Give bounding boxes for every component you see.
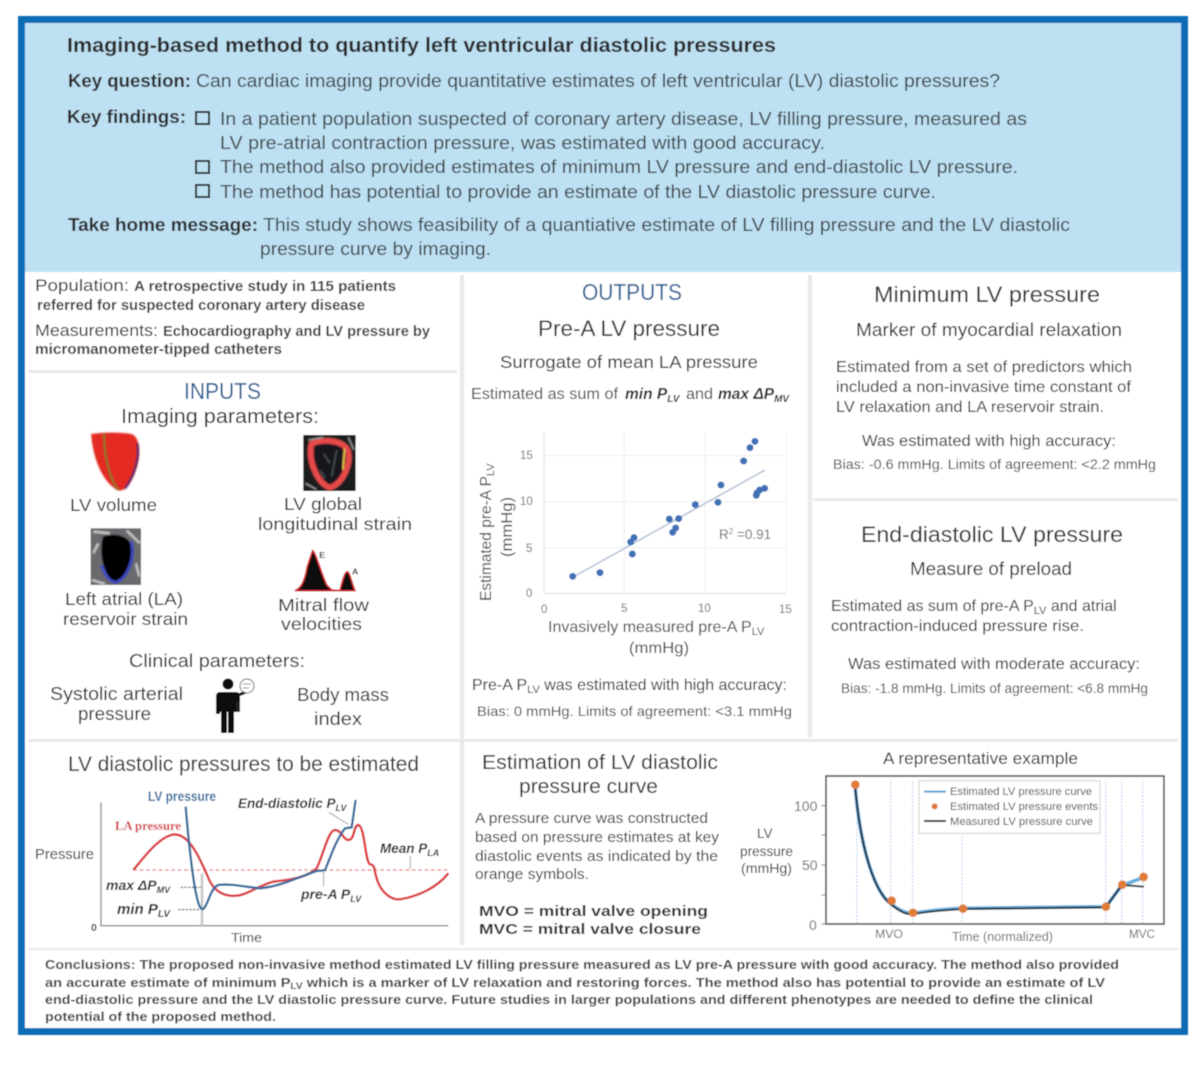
chart labels: LV [158,909,171,920]
panel: conclusions: Conclusions: The proposed non-invasive method estimated LV filling pressure measured as LV pre-A pressure with good accuracy. The method also provided [45,957,1119,972]
key findings: The method also provided estimates of minimum LV pressure and end-diastolic LV pressure. [220,157,1018,177]
icon: mitral flow velocity trace: E [319,550,325,560]
accuracy statement: LV [527,684,540,696]
chart labels: LV pressure [148,789,216,804]
panel: minimum LV pressure [833,282,1156,472]
example heading: A representative example [883,750,1078,768]
axis tick labels: 5 [526,543,532,555]
chart labels: max ΔP [106,877,157,893]
systolic arterial pressure label [50,684,183,724]
chart labels: MV [157,885,171,895]
panel: LV diastolic pressure curve method: diastolic events as indicated by the [475,848,718,865]
LV pressure curve [186,800,356,909]
accuracy statement: was estimated with high accuracy: [540,677,787,694]
panel: minimum LV pressure: included a non-invasive time constant of [836,379,1132,396]
panel: end-diastolic LV pressure: End-diastolic LV pressure [861,522,1123,547]
panel: summary header [25,23,1181,272]
panel: end-diastolic LV pressure: Bias: -1.8 mmHg. Limits of agreement: <6.8 mmHg [841,681,1148,696]
key findings: The method has potential to provide an estimate of the LV diastolic pressure curve. [220,182,936,202]
panel: minimum LV pressure: Estimated from a set of predictors which [836,359,1132,376]
x axis title [548,619,765,657]
chart labels: LA [427,848,439,858]
panel: population and measurements: Population: [35,277,129,295]
take home message [68,215,1070,259]
take home message: This study shows feasibility of a quantiative estimate of LV filling pressure and the LV diastolic [263,215,1070,235]
chart labels: LV [336,803,348,813]
pointer lines [178,887,201,910]
chart labels: Pressure [35,847,94,863]
icon: LV volume [91,432,139,491]
chart labels: End-diastolic P [238,796,336,811]
pressure curves chart [35,789,448,945]
axis tick labels: 10 [520,496,533,508]
legend box [919,781,1100,833]
estimate formula [471,386,790,405]
key question: Can cardiac imaging provide quantitative estimates of left ventricular (LV) diastolic pressures? [196,71,1000,91]
mean LA pressure line [133,868,448,872]
event markers [857,782,1143,923]
mitral flow velocities label: Mitral flow [278,595,369,615]
panel: outputs [471,279,792,719]
abbreviations: MVO = mitral valve opening [479,904,708,920]
key findings: Key findings: [67,107,186,127]
y axis title: Estimated pre-A P [478,476,495,601]
abbreviations [479,904,708,938]
axis tick labels: 15 [520,450,533,462]
y axis title: LV [485,463,497,476]
x axis title: LV [752,626,765,638]
panel: minimum LV pressure: Marker of myocardial relaxation [856,320,1122,340]
estimate formula: min P [625,386,667,403]
chart labels: LV [350,894,362,904]
inputs heading: INPUTS [184,378,261,404]
axis labels: 50 [802,857,818,873]
chart labels: LA pressure [115,819,181,833]
axis labels: Time (normalized) [952,930,1053,944]
icon: LA strain image [91,528,141,585]
clinical parameters heading: Clinical parameters: [129,650,305,671]
panel: conclusions: end-diastolic pressure and the LV diastolic pressure curve. Future studies in larger populations and different phenotypes are needed to define the clinical [45,992,1093,1007]
estimated curve [855,785,1144,913]
panel: minimum LV pressure: Bias: -0.6 mmHg. Limits of agreement: <2.2 mmHg [833,457,1156,472]
axis labels [740,798,1155,944]
take home message: pressure curve by imaging. [260,239,491,259]
legend labels [950,786,1099,828]
panel: minimum LV pressure: Minimum LV pressure [874,282,1100,307]
body mass index label: Body mass [297,685,389,705]
axis labels: 100 [794,798,818,814]
LV global longitudinal strain label [258,494,412,534]
panel: end-diastolic LV pressure [831,522,1148,696]
panel: LV diastolic pressure curve method: Estimation of LV diastolic [482,752,718,774]
axes [101,802,448,926]
estimate formula: Estimated as sum of [471,386,619,403]
pressure curve chart [740,776,1164,944]
chart labels: pre-A P [301,886,350,902]
panel: end-diastolic LV pressure: and atrial [1046,598,1117,615]
axis labels: (mmHg) [741,861,792,876]
chart labels: Time [231,930,262,945]
chart labels: min P [117,901,158,918]
legend labels: Estimated LV pressure curve [950,786,1092,798]
bias statement: Bias: 0 mmHg. Limits of agreement: <3.1 mmHg [477,703,792,719]
icon: person with gauge [216,678,254,733]
panel: LV diastolic pressure curve method: based on pressure estimates at key [475,829,720,846]
panel: population and measurements: Measurements: [35,322,158,340]
R squared: R [719,527,729,542]
panel: minimum LV pressure: LV relaxation and LA reservoir strain. [836,399,1104,416]
panel: end-diastolic LV pressure: LV [1034,605,1047,617]
panel: end-diastolic LV pressure: Was estimated with moderate accuracy: [848,656,1140,673]
pre-A LV pressure heading: Pre-A LV pressure [538,316,720,341]
mitral flow velocities label: velocities [281,614,362,634]
icon: mitral flow velocity trace: A [352,567,359,577]
chart labels: 0 [91,922,97,934]
panel: conclusions [45,957,1119,1024]
LA reservoir strain label [63,589,188,629]
axis tick labels: 10 [698,603,711,615]
abbreviations: MVC = mitral valve closure [479,922,701,938]
axis labels: 0 [809,917,817,933]
LV volume label: LV volume [70,495,157,515]
body mass index label: index [314,709,362,729]
axis tick labels: 0 [526,588,532,600]
panel: LV diastolic pressure curve method: orange symbols. [475,866,589,883]
title: Imaging-based method to quantify left ventricular diastolic pressures [67,35,776,57]
R squared: =0.91 [733,527,771,542]
panel: population and measurements: Echocardiography and LV pressure by [163,324,430,340]
panel: conclusions: an accurate estimate of minimum P [45,975,263,990]
panel: end-diastolic LV pressure: contraction-induced pressure rise. [831,618,1084,635]
axis tick labels: 5 [621,603,627,615]
axis tick labels: 0 [541,604,547,616]
x axis title: Invasively measured pre-A P [548,619,752,636]
panel: conclusions: potential of the proposed method. [45,1009,276,1024]
panel: conclusions: LV [290,981,303,991]
panel: conclusions: which is a marker of LV relaxation and restoring forces. The method also has potential to provide an estimate of LV [303,975,1105,990]
legend labels: Measured LV pressure curve [950,816,1093,828]
accuracy statement: Pre-A P [472,677,527,694]
key findings: In a patient population suspected of coronary artery disease, LV filling pressure, measured as [220,109,1027,129]
imaging parameters heading: Imaging parameters: [121,406,319,428]
panel: LV diastolic pressure curve method [475,752,720,938]
panel: LV diastolic pressure curve method: pressure curve [519,776,658,798]
panel: LV diastolic pressures diagram [35,753,448,945]
panel: population and measurements: A retrospective study in 115 patients [134,279,396,295]
estimate formula: MV [774,394,790,405]
LA reservoir strain label: reservoir strain [63,609,188,629]
plot frame [826,776,1164,924]
icon: LV strain image [303,435,356,491]
LA reservoir strain label: Left atrial (LA) [65,589,183,609]
measured curve [855,785,1144,914]
LV global longitudinal strain label: LV global [284,494,362,514]
panel: minimum LV pressure: Was estimated with high accuracy: [862,433,1116,450]
estimate formula: LV [667,394,681,405]
panel: population and measurements: micromanometer-tipped catheters [35,342,282,358]
systolic arterial pressure label: pressure [78,704,151,724]
panel: end-diastolic LV pressure: Estimated as sum of pre-A P [831,598,1034,615]
vertical marker [198,873,205,926]
LV global longitudinal strain label: longitudinal strain [258,514,412,534]
panel: population and measurements [35,277,430,358]
surrogate subtitle: Surrogate of mean LA pressure [500,352,758,372]
diagram heading: LV diastolic pressures to be estimated [68,753,419,776]
estimate formula: max ΔP [718,386,774,403]
axis tick labels [520,450,792,616]
trend line [575,470,765,576]
key findings [67,107,1027,202]
key findings: LV pre-atrial contraction pressure, was estimated with good accuracy. [220,133,825,153]
take home message: Take home message: [68,215,258,235]
body mass index label [297,685,389,729]
y axis title [478,463,516,601]
outputs heading: OUTPUTS [582,279,682,305]
event dots [851,780,1148,917]
axis tick labels: 15 [779,604,792,616]
R squared: 2 [729,527,734,536]
panel: LV diastolic pressure curve method: A pressure curve was constructed [475,810,708,827]
systolic arterial pressure label: Systolic arterial [50,684,183,704]
axis labels: MVC [1129,927,1155,941]
x axis title: (mmHg) [629,640,689,657]
axis labels: pressure [740,844,793,859]
axis labels: LV [757,826,773,841]
mitral flow velocities label [278,595,369,634]
icon: mitral flow velocity trace [295,550,359,591]
panel: inputs [50,378,412,733]
scatter chart [478,432,792,657]
panel: representative example [740,750,1164,944]
axis labels: MVO [875,927,903,941]
panel: end-diastolic LV pressure: Measure of preload [910,559,1072,579]
panel: population and measurements: referred for suspected coronary artery disease [37,298,365,314]
LA pressure curve [133,825,448,899]
chart labels [35,789,439,945]
chart labels: Mean P [380,841,427,856]
y axis title: (mmHg) [499,497,516,557]
estimate formula: and [686,386,713,403]
key question: Key question: [68,71,191,91]
legend labels: Estimated LV pressure events [950,801,1099,813]
data points [569,438,768,580]
